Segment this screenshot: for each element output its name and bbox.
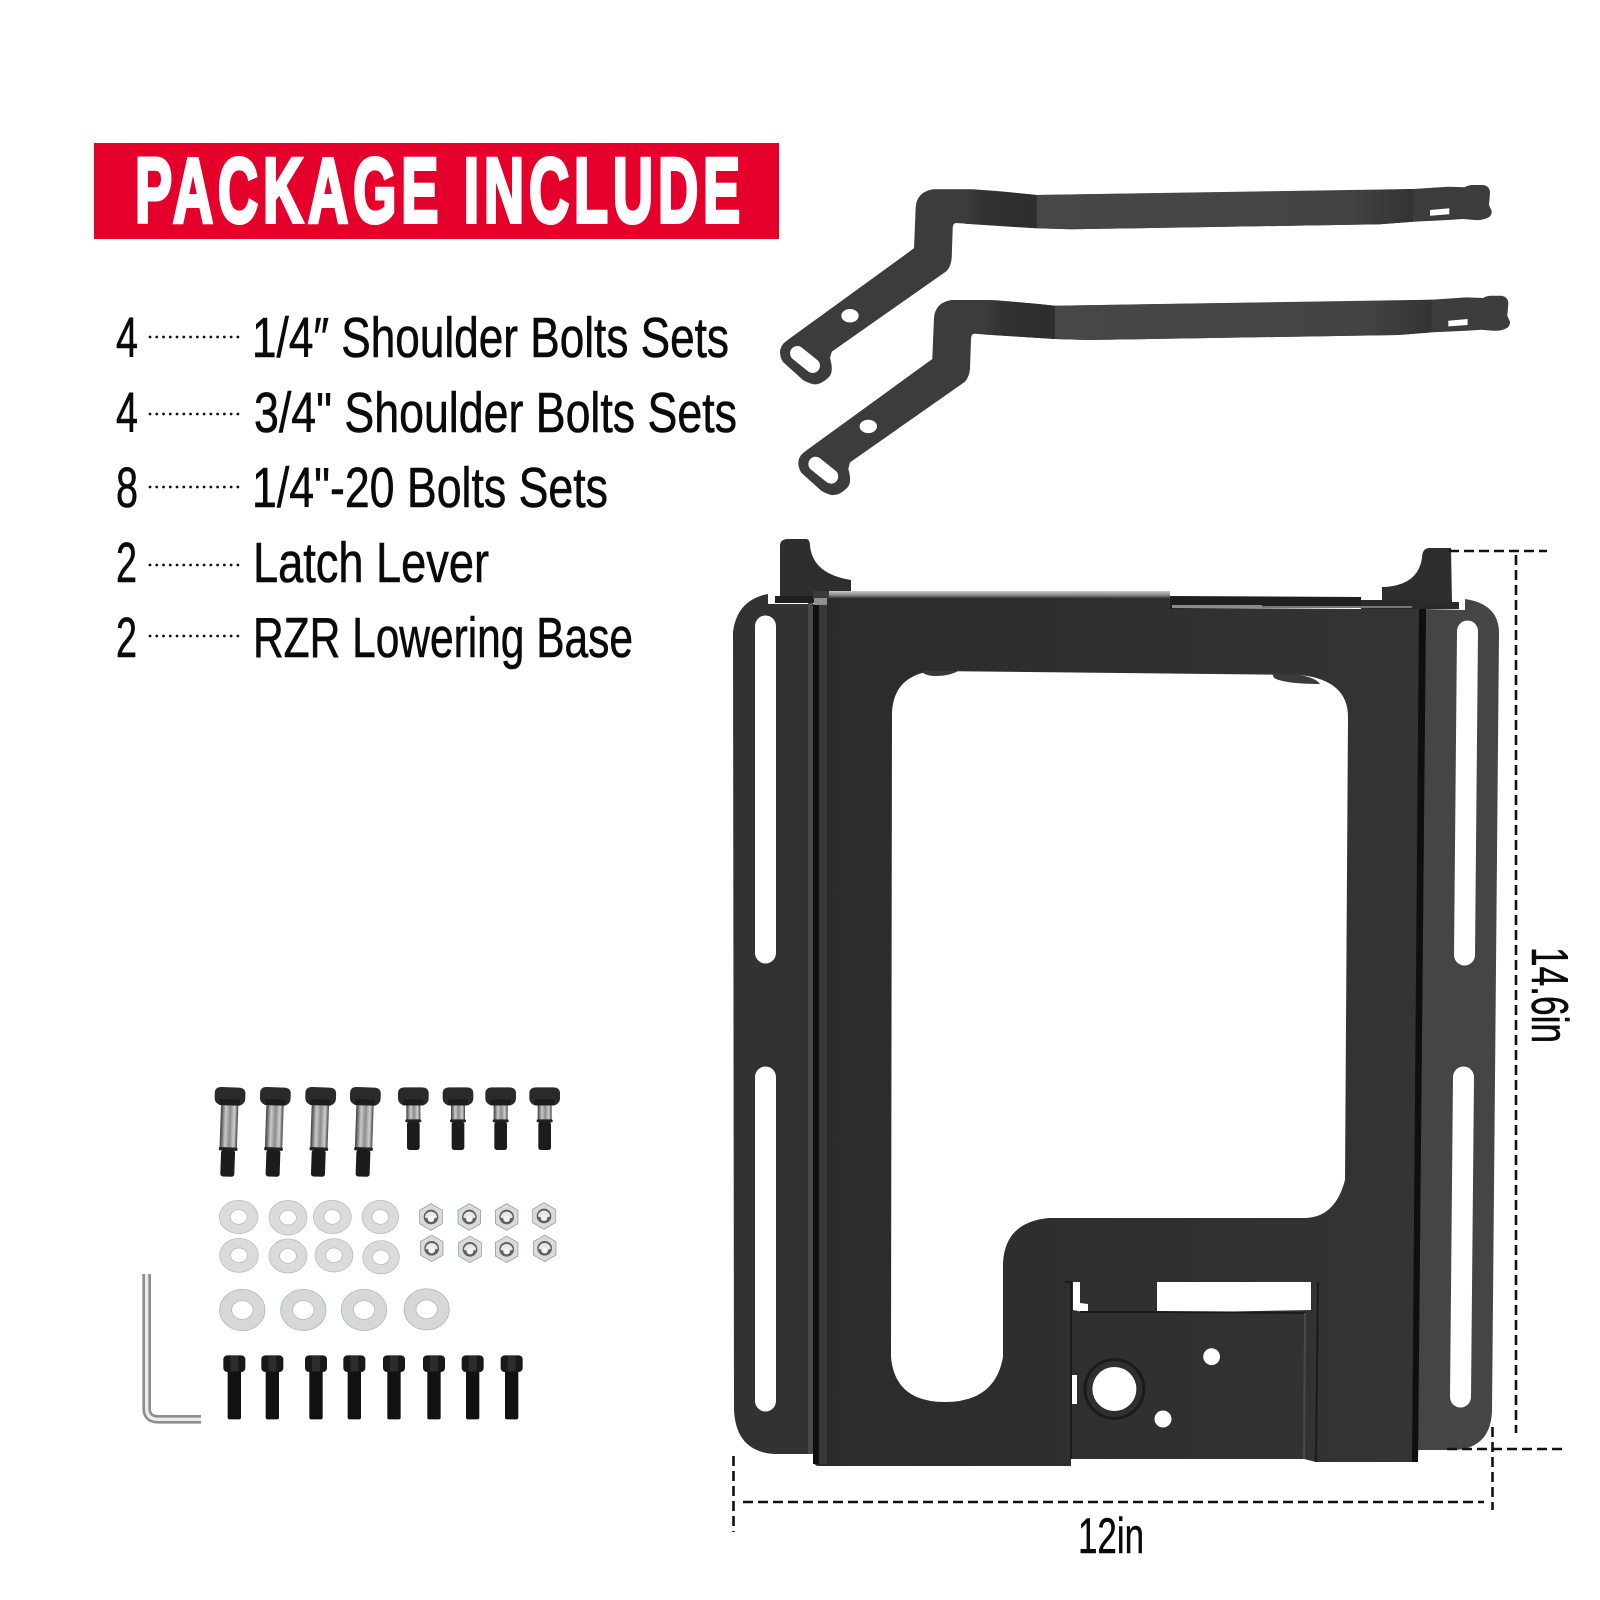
centre latch plate holes: [1083, 1348, 1220, 1428]
centre plate with cut-out: [814, 598, 1426, 1466]
row: shoulder bolts 3/4: [116, 381, 737, 445]
row: bolts 1/4-20: 1/4"-20 Bolts Sets: [252, 456, 608, 520]
row: lowering base: 2: [116, 606, 137, 670]
dimension label: 14.6in: 14.6in: [1520, 947, 1578, 1043]
dimension: width: [734, 1427, 1492, 1532]
latch lever brackets: [780, 185, 1510, 495]
RZR lowering base plate: [733, 539, 1499, 1466]
side flange: left: [733, 594, 814, 1454]
fold lines: [808, 603, 1426, 1464]
row: shoulder bolts 1/4: [116, 306, 729, 370]
dimension label: 12in: 12in: [1078, 1508, 1144, 1564]
dimension: height: [1447, 551, 1563, 1449]
bracket: upper latch lever: [780, 185, 1492, 384]
row: latch lever: [116, 531, 489, 595]
hex key: [147, 1274, 201, 1419]
row: shoulder bolts 3/4: 4: [116, 381, 138, 445]
long shoulder bolts: [212, 1087, 381, 1177]
row: lowering base: RZR Lowering Base: [253, 606, 633, 670]
row: latch lever: 2: [116, 531, 137, 595]
side flange: right: [1414, 599, 1499, 1450]
row: shoulder bolts 1/4: 4: [116, 306, 138, 370]
row: shoulder bolts 3/4: 3/4" Shoulder Bolts Sets: [254, 381, 737, 445]
small washers: [219, 1200, 399, 1274]
lock nuts: [420, 1203, 556, 1263]
row: shoulder bolts 1/4: 1/4″ Shoulder Bolts Sets: [252, 306, 729, 370]
hardware kit: [147, 1087, 560, 1419]
title banner: PACKAGE INCLUDE: [135, 140, 745, 242]
cap head bolts: [223, 1355, 523, 1419]
support tabs behind cut-out: [923, 671, 1320, 684]
mounting posts: [775, 539, 1459, 609]
short shoulder bolts: [398, 1087, 560, 1150]
large washers: [220, 1289, 449, 1331]
title banner: [94, 140, 779, 242]
row: lowering base: [116, 606, 633, 670]
package contents list: [116, 306, 737, 670]
row: bolts 1/4-20: 8: [116, 456, 138, 520]
top edge strip: [813, 591, 1426, 609]
row: latch lever: Latch Lever: [253, 531, 489, 595]
bracket: lower latch lever: [798, 296, 1510, 495]
row: bolts 1/4-20: [116, 456, 608, 520]
